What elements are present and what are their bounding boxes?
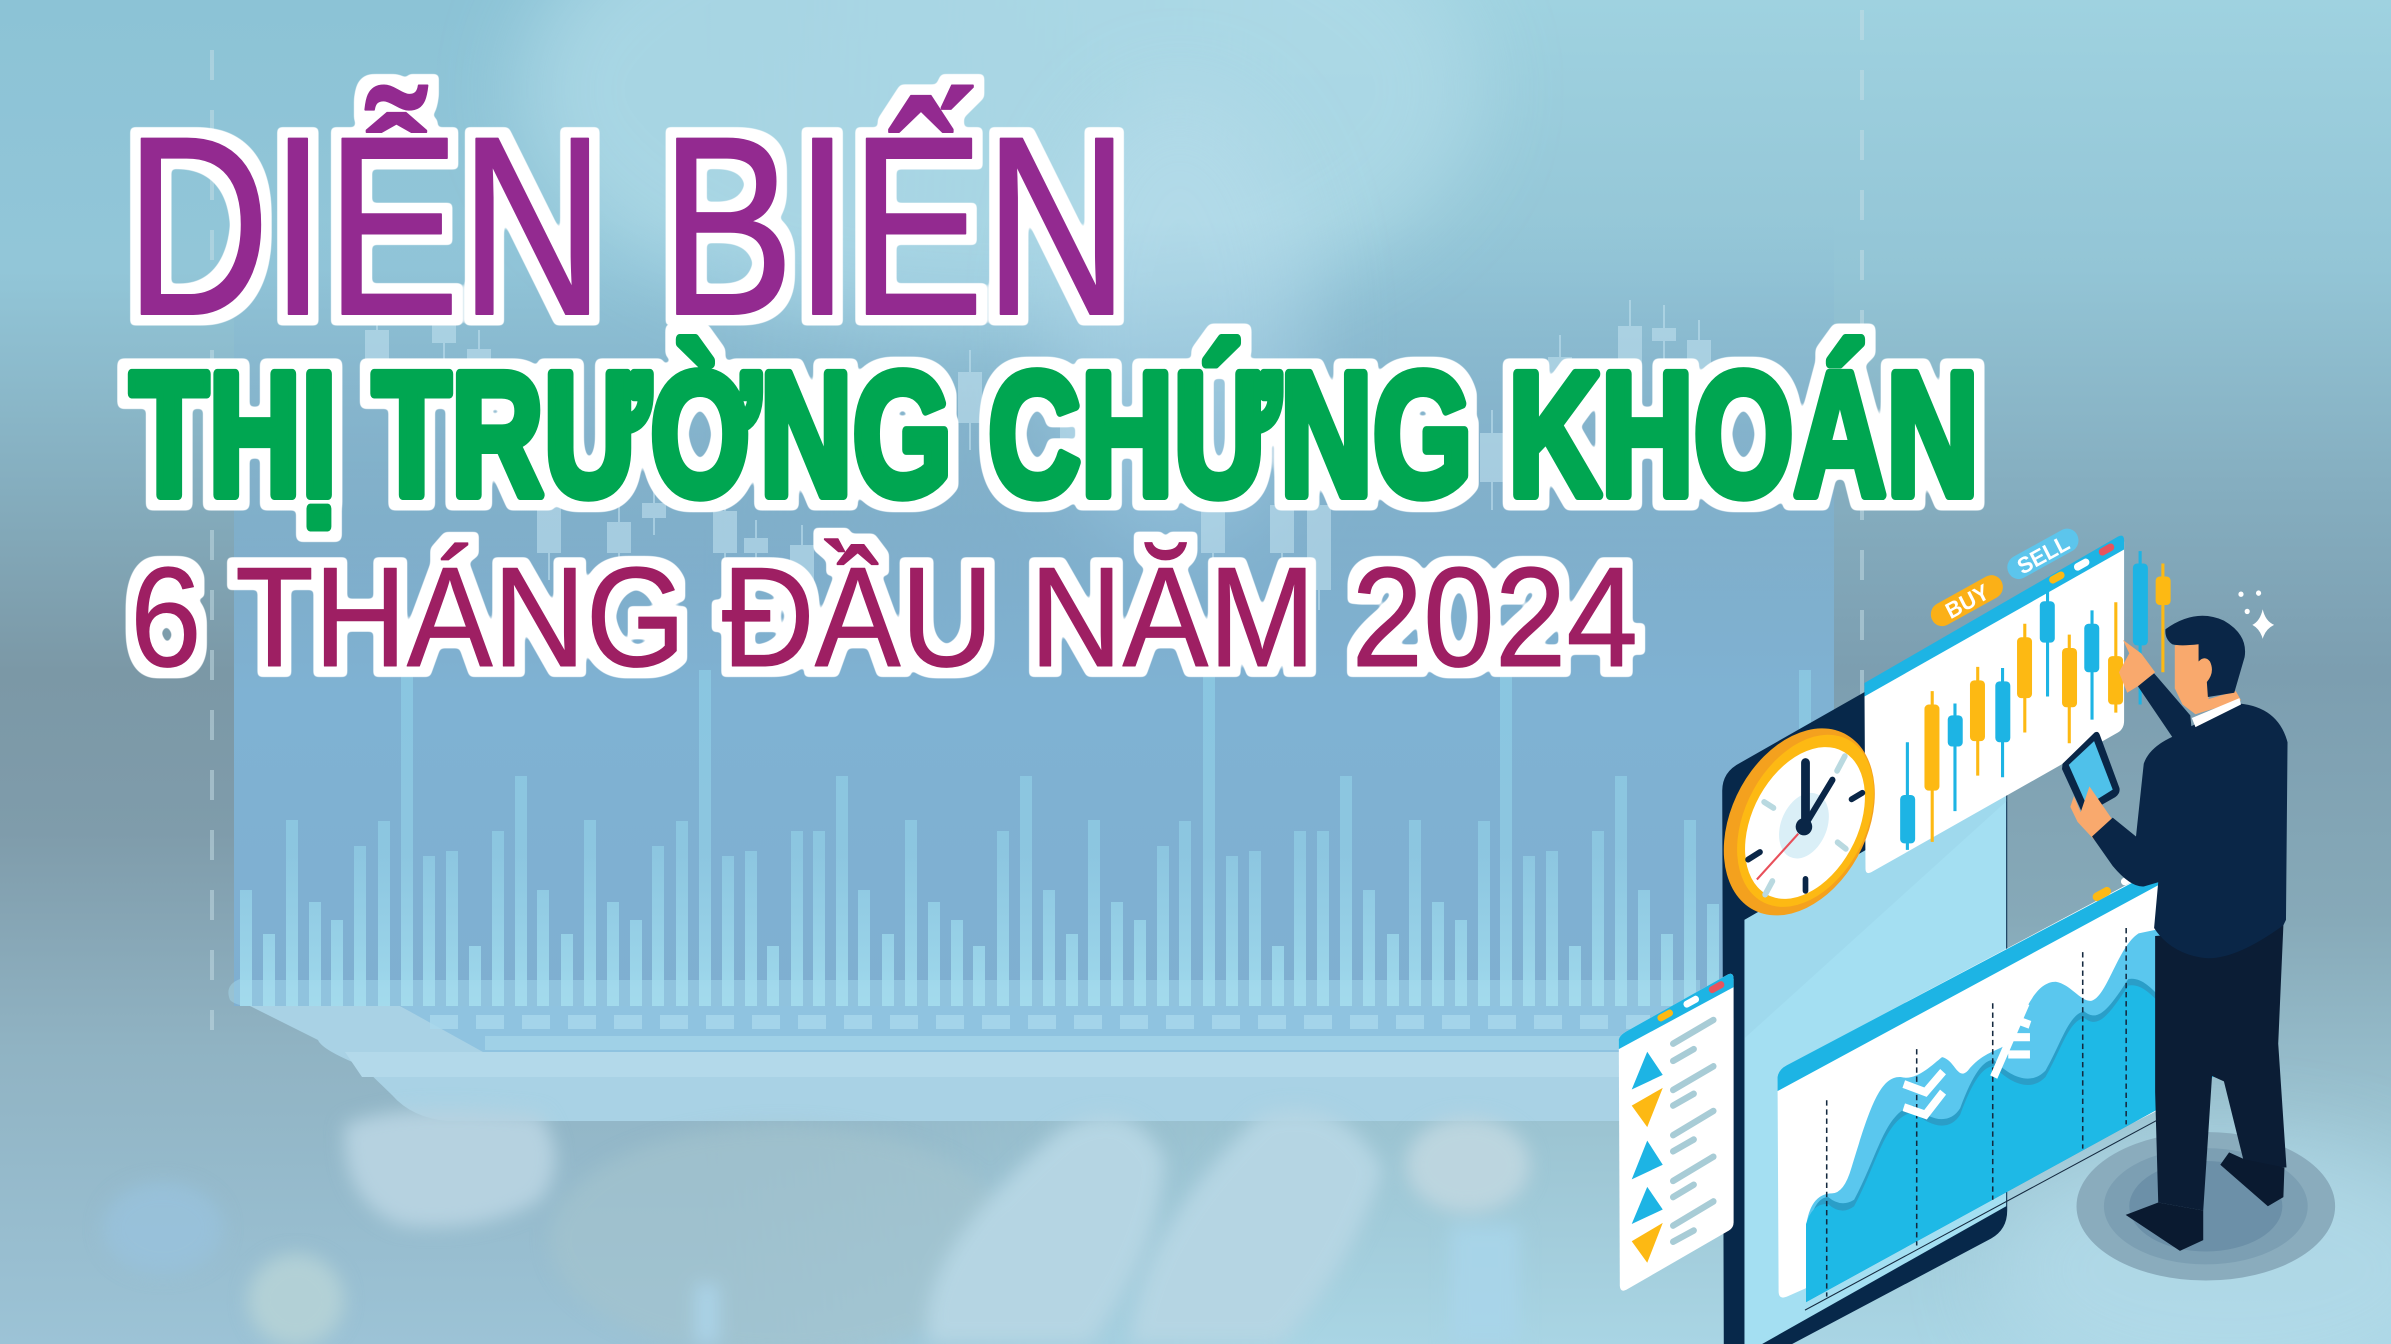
panel: signal list xyxy=(1619,974,1734,1291)
background: faint candlesticks xyxy=(365,300,1711,615)
illustration: trader with screens xyxy=(1619,524,2335,1344)
shade layer xyxy=(1806,979,2164,1302)
icon: wall clock xyxy=(1693,700,1906,944)
dashed markers xyxy=(1827,928,2126,1297)
trousers xyxy=(2155,925,2286,1211)
panel: candlestick chart window xyxy=(1864,536,2124,873)
shoes xyxy=(2126,1152,2284,1251)
candlesticks xyxy=(1900,551,2171,850)
subtitle: 6 THÁNG ĐẦU NĂM 2024: 6 THÁNG ĐẦU NĂM 2024 xyxy=(130,538,1638,697)
collar xyxy=(2192,698,2241,727)
background: tablet screen panel xyxy=(234,220,1834,1006)
white chevrons xyxy=(1904,1003,2030,1115)
background: tablet body xyxy=(228,979,1720,1121)
SELL button xyxy=(2003,524,2083,585)
panel: area chart window xyxy=(1778,866,2229,1310)
raised hand xyxy=(2119,640,2155,693)
hair xyxy=(2165,616,2245,697)
background: dashed guide lines xyxy=(212,10,1862,1030)
face and neck xyxy=(2175,641,2241,714)
hand tablet xyxy=(2062,732,2120,813)
BUY button xyxy=(1927,571,2008,632)
chart right edge behind trader xyxy=(2159,1030,2229,1107)
phone device xyxy=(1722,611,2007,1344)
title: DIỄN BIẾN: DIỄN BIẾN xyxy=(125,84,1129,369)
SELL button: SELL xyxy=(2013,530,2074,579)
background: blurred hand xyxy=(103,1109,1530,1344)
figure: trader xyxy=(2062,616,2288,1251)
icon: sparkle xyxy=(2238,590,2274,639)
BUY button: BUY xyxy=(1941,579,1993,624)
lower hand xyxy=(2070,786,2112,840)
background: bar chart on tablet xyxy=(240,670,1811,1006)
jacket xyxy=(2092,673,2288,958)
floor rings under trader xyxy=(2077,1132,2335,1281)
back mountain layer xyxy=(1806,928,2164,1302)
front mountain layer xyxy=(1806,985,2164,1302)
